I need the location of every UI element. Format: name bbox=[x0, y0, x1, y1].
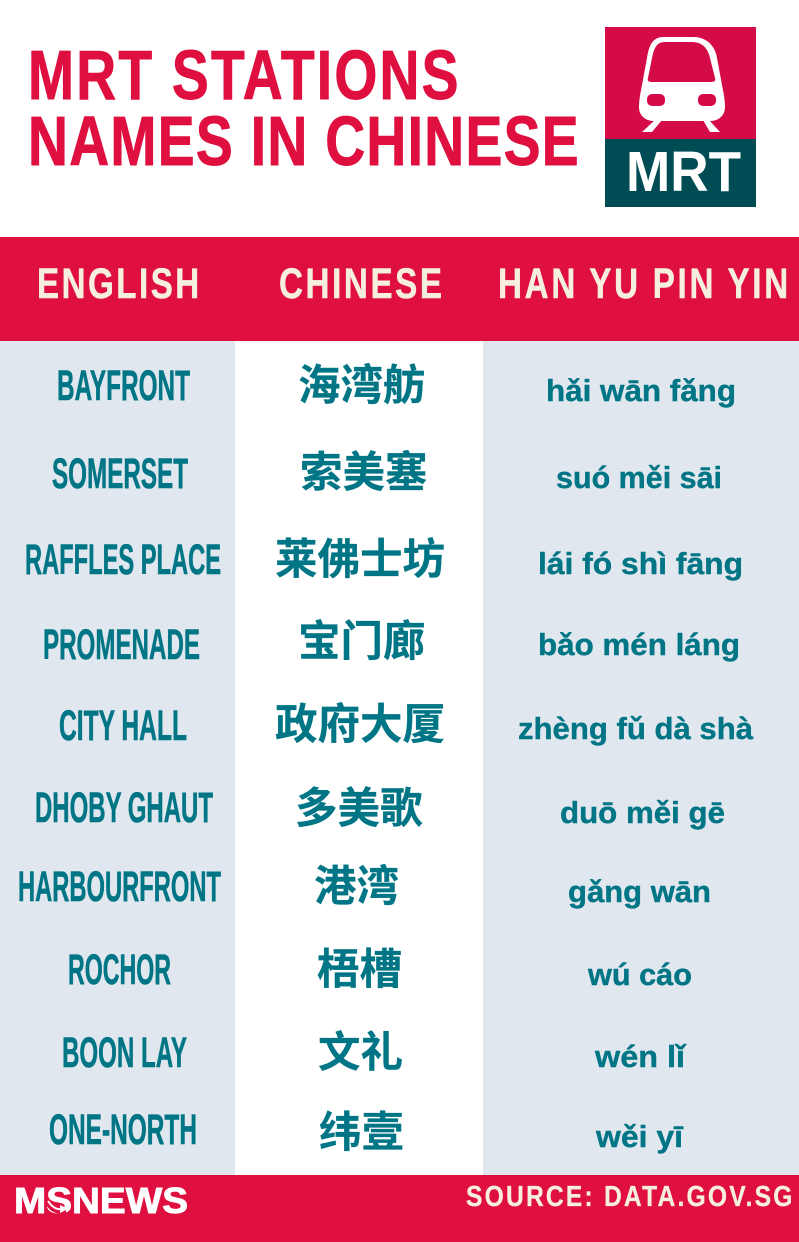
row: Harbourfront: HARBOURFRONT bbox=[18, 863, 221, 911]
row: City Hall bbox=[59, 702, 754, 750]
row: City Hall: CITY HALL bbox=[59, 702, 187, 750]
icon: MRT logo bbox=[605, 27, 756, 207]
logo: MS News: MSNEWS bbox=[14, 1180, 188, 1221]
header bar bbox=[0, 237, 799, 341]
row: One-North bbox=[49, 1106, 683, 1157]
row: Dhoby Ghaut: 多美歌 bbox=[295, 786, 423, 833]
row: Somerset: 索美塞 bbox=[300, 450, 428, 497]
source note: SOURCE: DATA.GOV.SG bbox=[466, 1180, 792, 1212]
title: MRT STATIONS bbox=[28, 37, 459, 115]
row: Rochor: ROCHOR bbox=[68, 946, 171, 994]
row: City Hall: 政府大厦 bbox=[275, 702, 445, 749]
row: Boon Lay: 文礼 bbox=[318, 1030, 403, 1077]
row: Raffles Place: RAFFLES PLACE bbox=[25, 536, 221, 584]
panel: English column background bbox=[0, 341, 235, 1175]
row: Dhoby Ghaut: DHOBY GHAUT bbox=[35, 784, 213, 832]
panel: Han Yu Pin Yin column background bbox=[483, 341, 799, 1175]
row: Bayfront: BAYFRONT bbox=[57, 362, 190, 410]
row: Dhoby Ghaut bbox=[35, 784, 725, 833]
row: Harbourfront bbox=[18, 863, 711, 911]
row: One-North: ONE-NORTH bbox=[49, 1106, 197, 1154]
row: Dhoby Ghaut: duō měi gē bbox=[560, 795, 725, 830]
column heading: English: ENGLISH bbox=[37, 261, 199, 308]
row: Bayfront: 海湾舫 bbox=[298, 363, 426, 410]
row: Raffles Place: lái fó shì fāng bbox=[538, 546, 743, 581]
row: Promenade bbox=[43, 619, 740, 669]
row: Raffles Place bbox=[25, 536, 743, 584]
row: One-North: 纬壹 bbox=[319, 1110, 404, 1157]
column heading: Chinese: CHINESE bbox=[279, 261, 442, 308]
row: Somerset: SOMERSET bbox=[52, 450, 188, 498]
row: Promenade: PROMENADE bbox=[43, 621, 200, 669]
row: One-North: wěi yī bbox=[595, 1119, 683, 1154]
row: Promenade: 宝门廊 bbox=[298, 619, 426, 666]
icon: MRT logo: MRT bbox=[626, 140, 741, 204]
row: Somerset: suó měi sāi bbox=[556, 460, 722, 495]
row: Bayfront: hǎi wān fǎng bbox=[546, 373, 736, 408]
row: City Hall: zhèng fǔ dà shà bbox=[518, 711, 754, 746]
row: Rochor: wú cáo bbox=[587, 957, 692, 992]
title bbox=[28, 37, 579, 181]
row: Harbourfront: gǎng wān bbox=[568, 874, 711, 909]
row: Rochor: 梧槽 bbox=[317, 947, 402, 994]
footer bar bbox=[0, 1175, 799, 1242]
row: Raffles Place: 莱佛士坊 bbox=[275, 537, 445, 584]
row: Somerset bbox=[52, 450, 722, 498]
row: Rochor bbox=[68, 946, 692, 994]
column heading: Han Yu Pin Yin: HAN YU PIN YIN bbox=[498, 261, 788, 308]
title: NAMES IN CHINESE bbox=[28, 103, 579, 181]
row: Boon Lay: BOON LAY bbox=[62, 1029, 187, 1077]
row: Promenade: bǎo mén láng bbox=[538, 627, 740, 662]
row: Boon Lay: wén lǐ bbox=[594, 1039, 686, 1074]
row: Boon Lay bbox=[62, 1029, 686, 1077]
row: Bayfront bbox=[57, 362, 736, 410]
row: Harbourfront: 港湾 bbox=[314, 864, 399, 911]
